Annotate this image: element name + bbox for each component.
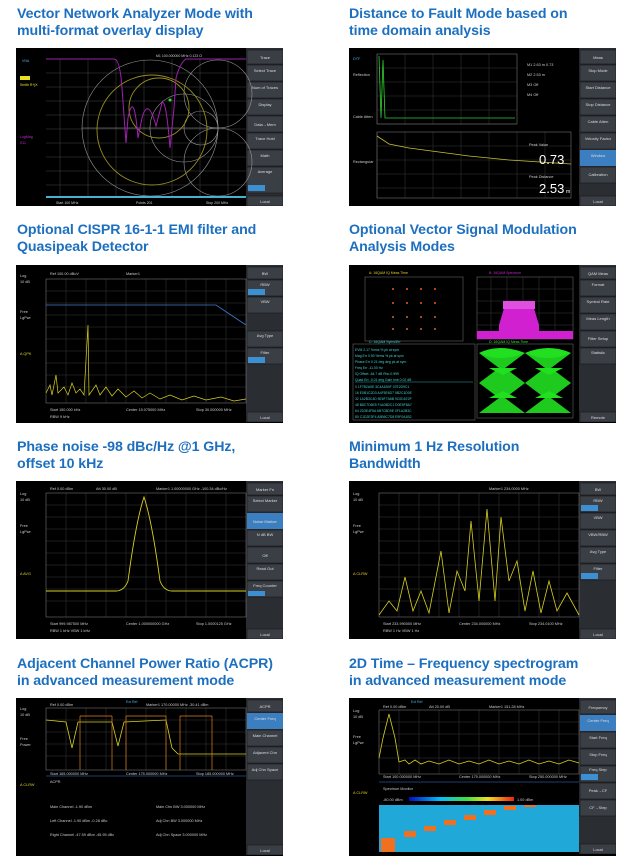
screen: VNA: M1 100.000000 MHz 0.123 Ω: [156, 54, 202, 58]
screen: phase noise: Select Marker: [253, 498, 278, 503]
screen: phase noise: Log: [20, 492, 26, 496]
screen: RBW: Avg Type: [590, 549, 607, 554]
screen: EMI: 10 dB: [20, 280, 30, 284]
screen: VSA: IQ Offset -64.7 dB Rho 0.999: [355, 372, 399, 376]
screen: spectrogram: Start 100.000000 MHz: [383, 775, 421, 779]
title: VNA: Vector Network Analyzer Mode with: [17, 6, 253, 22]
screen: VNA: Stop 200 MHz: [206, 201, 228, 205]
title: VSA: [349, 222, 577, 255]
screen: VSA: Filter Setup: [588, 336, 609, 341]
title: ACPR: Adjacent Channel Power Ratio (ACPR): [17, 656, 273, 672]
title: spectrogram: [349, 656, 578, 689]
screen: RBW: VBW/RBW: [588, 532, 608, 537]
screen: DTF: Peak Value: [529, 143, 548, 147]
title: ACPR: [17, 656, 273, 689]
screen: RBW: RBW 1 Hz VBW 1 Hz: [383, 629, 419, 633]
screen: VNA: S11: [20, 141, 26, 145]
screen: EMI: Stop 30.000000 MHz: [196, 408, 232, 412]
screen: RBW: Local: [593, 632, 603, 637]
screen: VSA: Mag Err 0.50 %rms % pk at sym: [355, 354, 404, 358]
screen: VSA: Statistic: [591, 350, 605, 355]
screen: VNA: Start 100 MHz: [56, 201, 79, 205]
screen: DTF: m: [566, 189, 570, 195]
screen: VNA: Trace: [260, 55, 271, 60]
screen: spectrogram: Ref 0.00 dBm: [383, 705, 406, 709]
screen: VSA: D: 16QAM IQ Meas Time: [489, 340, 528, 344]
screen: RBW: BW: [595, 487, 601, 492]
screen: ACPR: Local: [260, 848, 270, 853]
screen: EMI: LgPwr: [20, 316, 31, 320]
screen: EMI: Center 15.075000 MHz: [126, 408, 165, 412]
title: VNA: [17, 6, 253, 39]
screen: phase noise: LgPwr: [20, 530, 31, 534]
screen: VNA: Trace Hold: [255, 136, 275, 141]
screen: ACPR: Ext Ref: [126, 700, 138, 704]
screen: ACPR: Adj Chn Space: [252, 767, 279, 772]
screen: RBW: Marker1 234.0000 MHz: [489, 487, 529, 491]
screen: EMI: RBW 9 kHz: [50, 415, 70, 419]
screen: DTF: Reflection: [353, 73, 370, 77]
screen: ACPR: Ref 0.00 dBm: [50, 703, 73, 707]
title: VSA: Optional Vector Signal Modulation: [349, 222, 577, 238]
title: VNA: multi-format overlay display: [17, 23, 203, 39]
screen: VSA: Format: [592, 282, 605, 287]
screen: DTF: M3 Off: [527, 83, 539, 87]
screen: spectrogram: -80.00 dBm: [383, 798, 403, 802]
screen: VNA: [16, 48, 283, 206]
screen: VNA: Data→Mem: [254, 122, 276, 127]
screen: phase noise: Off: [262, 553, 269, 558]
title: EMI: Optional CISPR 16-1-1 EMI filter and: [17, 222, 256, 238]
screen: EMI: Filter: [261, 350, 270, 355]
title: RBW: Minimum 1 Hz Resolution: [349, 439, 519, 455]
screen: spectrogram: [349, 698, 616, 856]
screen: phase noise: RBW 1 kHz VBW 1 kHz: [50, 629, 90, 633]
screen: ACPR: Main Channel: [253, 733, 277, 738]
title: DTF: [349, 6, 567, 39]
title: RBW: [349, 439, 519, 472]
screen: ACPR: Stop 185.000000 MHz: [196, 772, 234, 776]
screen: ACPR: Center Freq: [254, 716, 276, 721]
screen: EMI: Ref 100.00 dBuV: [50, 272, 79, 276]
title: EMI: [17, 222, 256, 255]
screen: VNA: Display: [258, 102, 272, 107]
screen: DTF: Rectangular: [353, 160, 374, 164]
screen: ACPR: Adj Chn Space 3.000000 MHz: [156, 833, 207, 837]
screen: spectrogram: 1.00 dBm: [517, 798, 533, 802]
screen: VNA: VNA: [22, 59, 30, 63]
screen: VSA: Freq Err -11.00 Hz: [355, 366, 383, 370]
title: VSA: Analysis Modes: [349, 239, 455, 255]
screen: DTF: Window: [591, 153, 605, 158]
title: spectrogram: in advanced measurement mode: [349, 673, 566, 689]
screen: VSA: Remote: [591, 415, 606, 420]
screen: phase noise: Center 1.000000000 GHz: [126, 622, 169, 626]
screen: spectrogram: Peak→CF: [589, 788, 608, 793]
screen: VSA: Symbol Rate: [587, 299, 610, 304]
title: phase noise: [17, 439, 235, 472]
screen: phase noise: Att 30.00 dB: [96, 487, 117, 491]
screen: RBW: RBW: [593, 498, 603, 503]
screen: spectrogram: Center 175.000000 MHz: [459, 775, 500, 779]
screen: phase noise: Noise Marker: [253, 519, 278, 524]
screen: DTF: Velocity Factor: [585, 136, 612, 141]
screen: DTF: M2 2.53 m: [527, 73, 545, 77]
screen: VSA: 16 E0B1C2D3 A4F5E6D7 5B2C1D0E: [355, 391, 413, 395]
screen: phase noise: Start 999.987500 MHz: [50, 622, 88, 626]
screen: ACPR: 10 dB: [20, 713, 30, 717]
screen: RBW: [349, 481, 616, 639]
screen: VNA: Select Trace: [254, 68, 277, 73]
title: EMI: Quasipeak Detector: [17, 239, 148, 255]
screen: RBW: A CLRW: [353, 572, 368, 576]
screen: VNA: Local: [260, 199, 270, 204]
screen: VSA: 64 2D3E4F5A 6B7C8D9E 0F1A2B3C: [355, 409, 412, 413]
screen: spectrogram: Ext Ref: [411, 700, 423, 704]
screen: VSA: 80 C1D2E3F4 A5B6C7D8 E9F0A1B2: [355, 415, 412, 419]
screen: spectrogram: 10 dB: [353, 715, 363, 719]
screen: EMI: VBW: [260, 299, 270, 304]
screen: EMI: Marker1: [126, 272, 140, 276]
screen: EMI: Log: [20, 274, 26, 278]
screen: spectrogram: Log: [353, 709, 359, 713]
screen: spectrogram: Start Freq: [589, 735, 607, 740]
screen: DTF: Local: [593, 199, 603, 204]
screen: VSA: QAM Meas: [588, 271, 608, 276]
screen: ACPR: Marker1 170.00000 MHz -30.41 dBm: [146, 703, 208, 707]
screen: EMI: Local: [260, 415, 270, 420]
screen: DTF: M1 2.63 m 0.73: [527, 63, 553, 67]
screen: spectrogram: Stop Freq: [589, 752, 607, 757]
screen: VSA: A: 16QAM IQ Meas Time: [369, 271, 408, 275]
screen: ACPR: Adj Chn BW 3.000000 MHz: [156, 819, 203, 823]
screen: RBW: Filter: [594, 566, 603, 571]
screen: spectrogram: Frequency: [589, 705, 607, 710]
screen: spectrogram: A CLRW: [353, 791, 368, 795]
screen: VSA: C: 16QAM Syms/Err: [369, 340, 402, 344]
screen: phase noise: Stop 1.0000125 GHz: [196, 622, 232, 626]
screen: spectrogram: CF→Step: [589, 805, 608, 810]
screen: DTF: Calibration: [588, 172, 608, 177]
screen: DTF: 2.53: [539, 181, 564, 196]
screen: phase noise: Free: [20, 524, 28, 528]
screen: spectrogram: Marker1 151.28 MHz: [489, 705, 525, 709]
screen: VNA: LogMag: [20, 135, 33, 139]
screen: ACPR: Right Channel -47.59 dBm -45.95 dBc: [50, 833, 114, 837]
screen: ACPR: Main Chn BW 3.000000 MHz: [156, 805, 205, 809]
screen: VNA: Num of Traces: [252, 85, 278, 90]
screen: VSA: [349, 265, 616, 423]
screen: RBW: Log: [353, 492, 359, 496]
screen: ACPR: Main Channel -1.90 dBm: [50, 805, 92, 809]
screen: RBW: 10 dB: [353, 498, 363, 502]
screen: VSA: Meas Length: [586, 316, 610, 321]
screen: phase noise: Read Out: [256, 566, 274, 571]
screen: ACPR: [16, 698, 283, 856]
screen: ACPR: ACPR: [50, 780, 61, 784]
screen: spectrogram: Spectrum Monitor: [383, 787, 414, 791]
screen: EMI: [16, 265, 283, 423]
screen: VNA: Smith R+jX: [20, 83, 38, 87]
screen: spectrogram: Stop 250.000000 MHz: [529, 775, 567, 779]
screen: DTF: [349, 48, 616, 206]
screen: spectrogram: LgPwr: [353, 741, 364, 745]
screen: ACPR: A CLRW: [20, 783, 35, 787]
screen: phase noise: [16, 481, 283, 639]
screen: phase noise: Freq Counter: [253, 583, 277, 588]
screen: spectrogram: Local: [593, 847, 603, 852]
screen: DTF: Cable Atten: [353, 115, 373, 119]
title: RBW: Bandwidth: [349, 456, 421, 472]
screen: EMI: A QPK: [20, 352, 32, 356]
screen: phase noise: 10 dB: [20, 498, 30, 502]
screen: DTF: Meas: [593, 55, 603, 60]
screen: DTF: Cable Atten: [588, 119, 608, 124]
screen: DTF: DTF: [353, 57, 361, 61]
screen: EMI: RBW: [260, 282, 270, 287]
screen: DTF: Peak Distance: [529, 175, 553, 179]
screen: VNA: Average: [258, 169, 273, 174]
screen: VNA: Math: [261, 153, 269, 158]
screen: DTF: 0.73: [539, 152, 564, 167]
screen: EMI: Free: [20, 310, 28, 314]
screen: ACPR: Center 175.000000 MHz: [126, 772, 167, 776]
screen: DTF: Start Distance: [585, 85, 611, 90]
screen: spectrogram: Freq Step: [589, 767, 608, 772]
screen: EMI: Start 150.000 kHz: [50, 408, 80, 412]
screen: VSA: Quad Err -0.01 deg Gain Imb 0.02 dB: [355, 378, 412, 382]
screen: phase noise: N dB BW: [257, 532, 273, 537]
screen: spectrogram: Att 20.00 dB: [429, 705, 450, 709]
screen: ACPR: Start 165.000000 MHz: [50, 772, 88, 776]
title: ACPR: in advanced measurement mode: [17, 673, 234, 689]
screen: ACPR: Free: [20, 737, 28, 741]
screen: spectrogram: Free: [353, 735, 361, 739]
screen: phase noise: Marker1 1.00000000 GHz -100.34 dBc/Hz: [156, 487, 227, 491]
screen: VSA: 48 B8C7D6E5 F4A3B2C1 D0E9F8A7: [355, 403, 412, 407]
screen: phase noise: A AVG: [20, 572, 31, 576]
screen: VSA: 0 1F7B2A0E 3C4A1B0F 07E2D9C1: [355, 385, 409, 389]
screen: ACPR: ACPR: [259, 704, 271, 709]
screen: EMI: Avg Type: [257, 333, 274, 338]
screen: RBW: Free: [353, 524, 361, 528]
screen: VSA: B: 16QAM Spectrum: [489, 271, 521, 275]
screen: RBW: Stop 234.0100 MHz: [529, 622, 563, 626]
screen: DTF: Stop Mode: [588, 68, 608, 73]
screen: DTF: Stop Distance: [586, 102, 611, 107]
title: DTF: Distance to Fault Mode based on: [349, 6, 567, 22]
screen: ACPR: Left Channel -1.90 dBm -0.28 dBc: [50, 819, 108, 823]
title: DTF: time domain analysis: [349, 23, 491, 39]
screen: RBW: Center 234.000000 MHz: [459, 622, 500, 626]
screen: VSA: EVM 2.17 %rms % pk at sym: [355, 348, 399, 352]
title: spectrogram: 2D Time – Frequency spectrogram: [349, 656, 578, 672]
screen: spectrogram: Center Freq: [587, 718, 609, 723]
screen: RBW: Start 233.990000 MHz: [383, 622, 421, 626]
screen: VSA: Phase Err 0.21 deg deg pk at sym: [355, 360, 406, 364]
screen: ACPR: Adjacent Chn: [253, 750, 277, 755]
screen: VNA: Points 201: [136, 201, 153, 205]
title: phase noise: offset 10 kHz: [17, 456, 103, 472]
screen: EMI: BW: [262, 271, 268, 276]
title: phase noise: Phase noise -98 dBc/Hz @1 GHz,: [17, 439, 235, 455]
screen: ACPR: Power: [20, 743, 31, 747]
screen: phase noise: Ref 0.00 dBm: [50, 487, 73, 491]
screen: RBW: LgPwr: [353, 530, 364, 534]
screen: VSA: 32 1A2B3C4D 5E6F7A8B 9C0D1E2F: [355, 397, 412, 401]
screen: ACPR: Log: [20, 707, 26, 711]
screen: RBW: VBW: [593, 515, 603, 520]
screen: phase noise: Local: [260, 632, 270, 637]
screen: phase noise: Marker Fn: [256, 487, 274, 492]
screen: DTF: M4 Off: [527, 93, 539, 97]
